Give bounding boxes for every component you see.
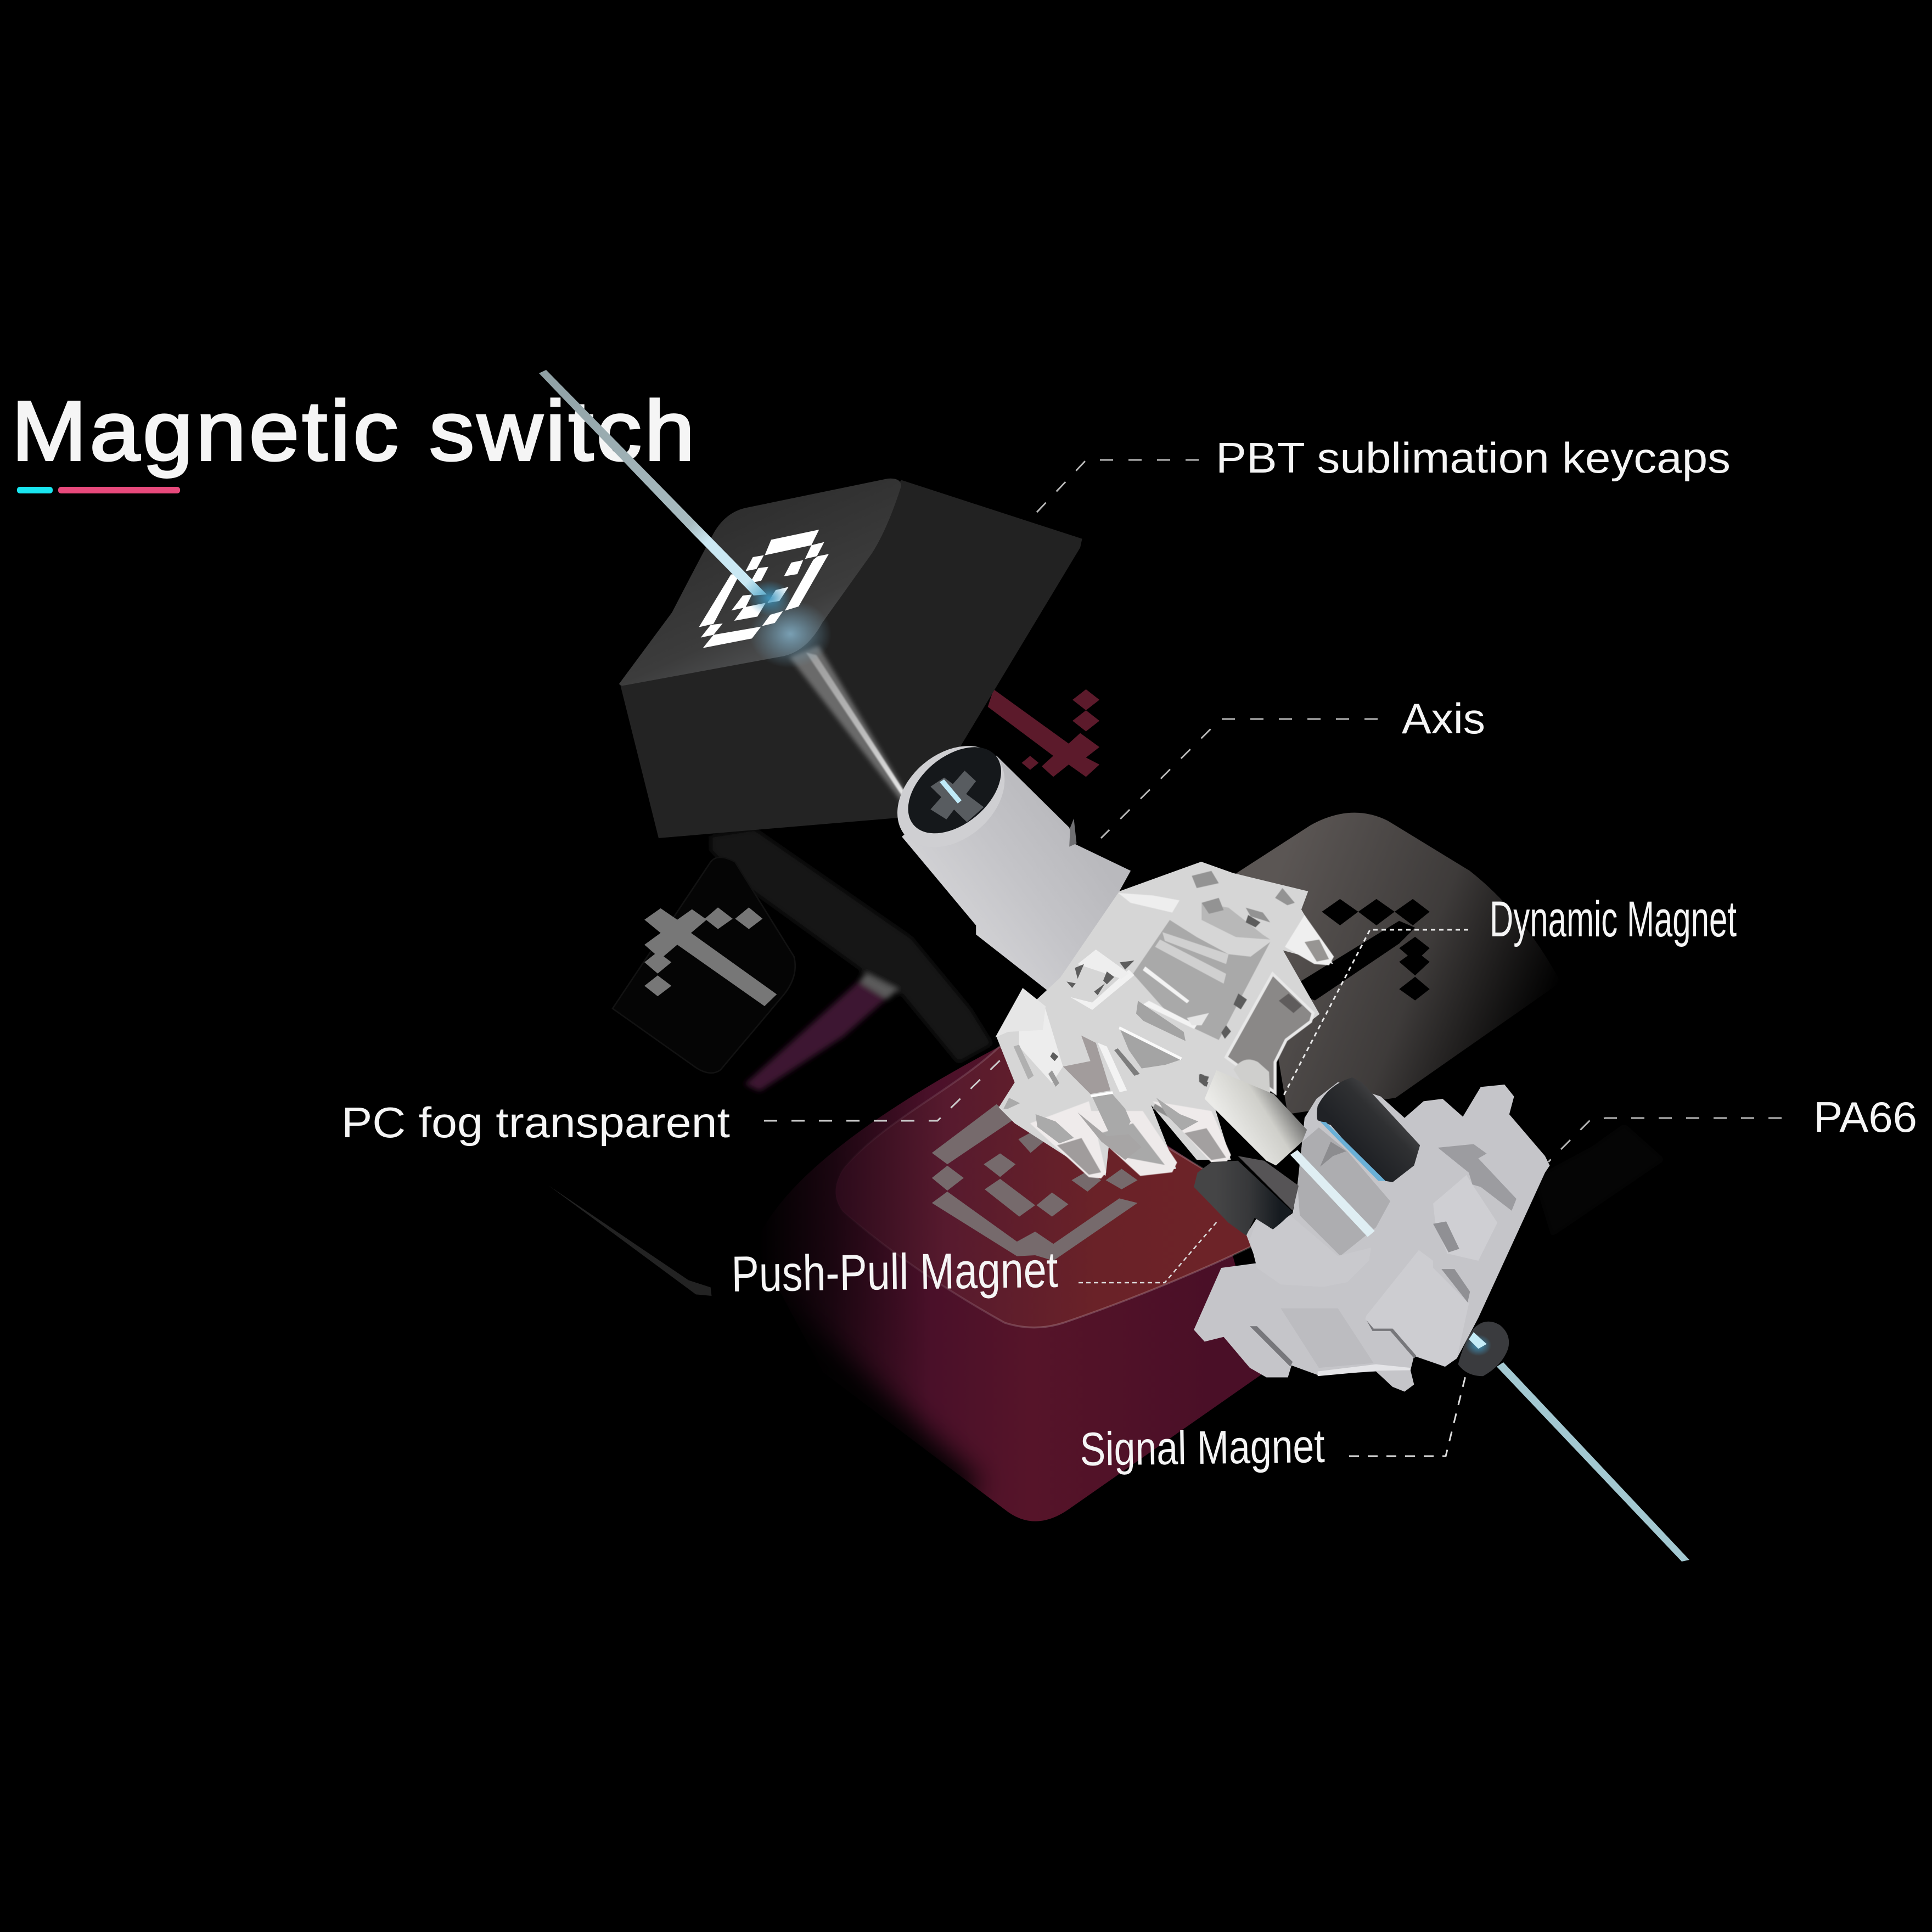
bottom strip [1318, 1364, 1411, 1376]
title: Magnetic switch [12, 384, 698, 478]
leader: Signal [1349, 1376, 1465, 1456]
icon: smiley logo [699, 530, 829, 648]
keycap edge glow [789, 645, 919, 816]
dark red pixel glyph [988, 689, 1099, 777]
cross stem [930, 771, 984, 822]
front block [1365, 1250, 1469, 1367]
central window [1133, 920, 1270, 1040]
light left plates [1019, 1006, 1063, 1083]
crystal detail: upper part [1030, 871, 1334, 1178]
leader: Dynamic Magnet [1283, 930, 1468, 1097]
keycap edge highlight [806, 653, 919, 816]
specks [1199, 915, 1260, 1087]
red keycap edge fade [752, 1301, 966, 1498]
black pixel glyph [1290, 899, 1430, 1001]
dark specks [1050, 961, 1209, 1087]
upper rod [539, 370, 767, 596]
label: Axis: Axis [1402, 694, 1485, 743]
axis body [902, 756, 1131, 1001]
crystal detail: left part [995, 950, 1209, 1160]
leader: PC fog [764, 1059, 1001, 1121]
white crystal ribs [1098, 1043, 1127, 1092]
dark block [1238, 1156, 1299, 1211]
axis opening [892, 730, 1018, 851]
leg A [1030, 1101, 1106, 1178]
keycap top face [619, 479, 901, 686]
upper edge highlight [1118, 893, 1180, 913]
axis rim [878, 725, 1025, 868]
rear magnet blue strip [1320, 1121, 1385, 1181]
upper right leg [1285, 915, 1334, 965]
red keycap logo [932, 1104, 1138, 1261]
leader: Push-Pull [1079, 1221, 1217, 1283]
leader: PBT [1030, 460, 1199, 520]
rod inside housing [1290, 1150, 1375, 1237]
label: Push-Pull Magnet: Push-Pull Magnet [731, 1242, 1058, 1302]
axis rod highlight [940, 779, 962, 804]
rear magnet [1317, 1077, 1420, 1182]
grey shards [1014, 1044, 1034, 1080]
label: PBT sublimation keycaps: PBT sublimation keycaps [1216, 434, 1731, 482]
housing body [1194, 1082, 1550, 1391]
right panel [1226, 974, 1313, 1093]
housing arm [1250, 1216, 1371, 1287]
front magnet [1194, 1161, 1293, 1235]
leader: PA66 [1548, 1118, 1782, 1162]
grey pixel glyph [644, 907, 777, 1006]
inner stem [1205, 1070, 1307, 1165]
background keycap: dark right [1233, 813, 1665, 1237]
keycap right face [788, 480, 1082, 816]
background keycap: dark left [549, 829, 992, 1296]
label: Signal Magnet: Signal Magnet [1080, 1420, 1325, 1476]
housing slots [1438, 1144, 1517, 1211]
lower centre [1280, 1308, 1374, 1368]
PC fog crystal housing [997, 862, 1333, 1176]
background keycap: red [755, 1046, 1265, 1521]
blue glow on key corner [749, 600, 832, 668]
lower rod [1497, 1362, 1689, 1562]
label: PC fog transparent: PC fog transparent [341, 1098, 730, 1147]
keycap [619, 479, 1082, 838]
housing recess [1298, 1127, 1390, 1256]
upper panel [1201, 903, 1270, 940]
axis [878, 725, 1131, 1001]
label: Dynamic Magnet: Dynamic Magnet [1490, 891, 1737, 947]
title underline [17, 487, 180, 493]
blue glow on logo [748, 581, 791, 616]
keycap left face [620, 653, 918, 838]
leader: Axis [1101, 719, 1378, 838]
stem cap [1233, 1060, 1270, 1101]
leg C [1153, 1101, 1231, 1162]
signal magnet [1458, 1322, 1509, 1376]
PA66 housing [1194, 1070, 1550, 1391]
leg B [1077, 1111, 1177, 1176]
label: PA66: PA66 [1813, 1093, 1917, 1141]
